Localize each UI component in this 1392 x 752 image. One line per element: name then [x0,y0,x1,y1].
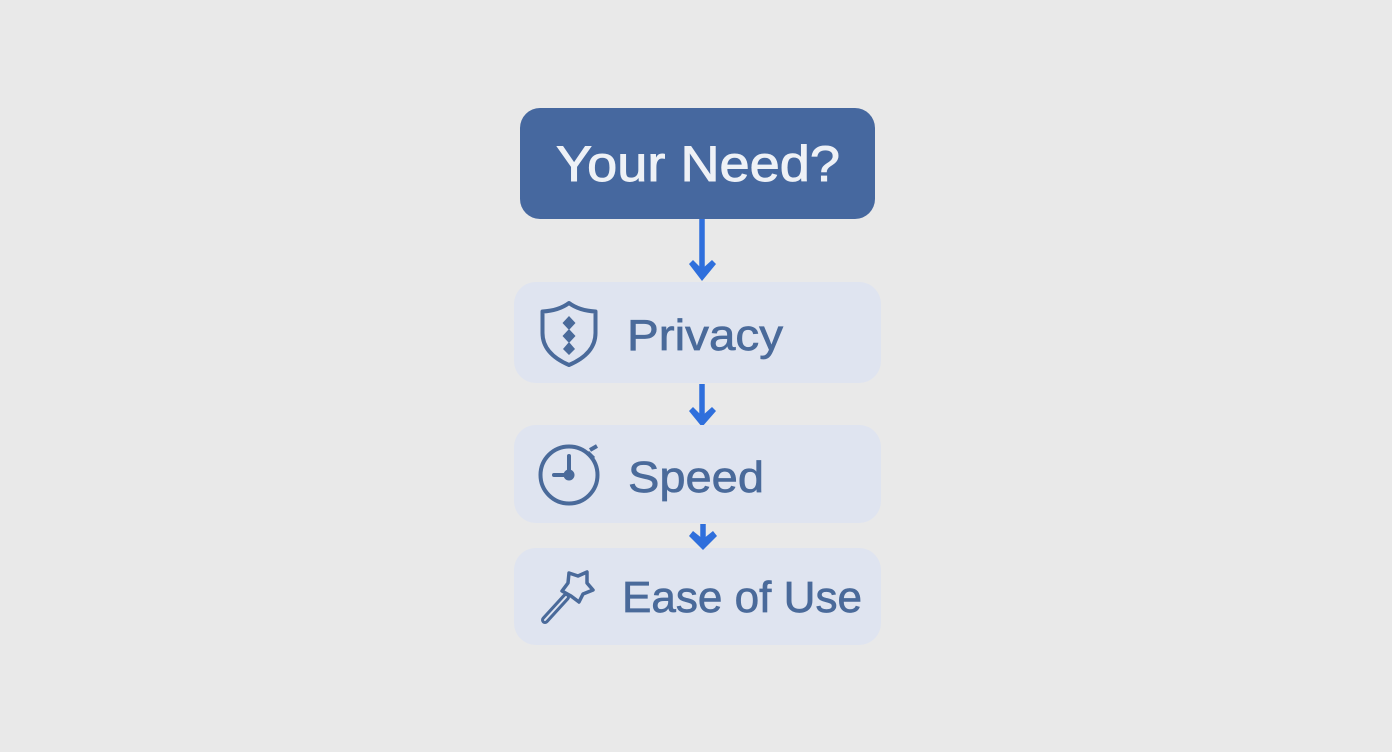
icon: shield [542,303,596,365]
icon: magic wand [545,572,593,620]
arrow: privacy to speed [689,384,716,427]
icon: stopwatch [540,446,598,504]
arrow: need to privacy [689,219,716,281]
label: Privacy: Privacy [627,311,783,360]
heading box: Your Need? [520,108,875,219]
panel: privacy [514,282,881,383]
heading box: Your Need?: Your Need? [556,136,840,192]
label: Speed: Speed [628,453,764,502]
panel: ease of use [514,548,881,645]
panel: speed [514,425,881,523]
arrow: speed to ease of use [689,524,717,550]
label: Ease of Use: Ease of Use [622,573,862,622]
